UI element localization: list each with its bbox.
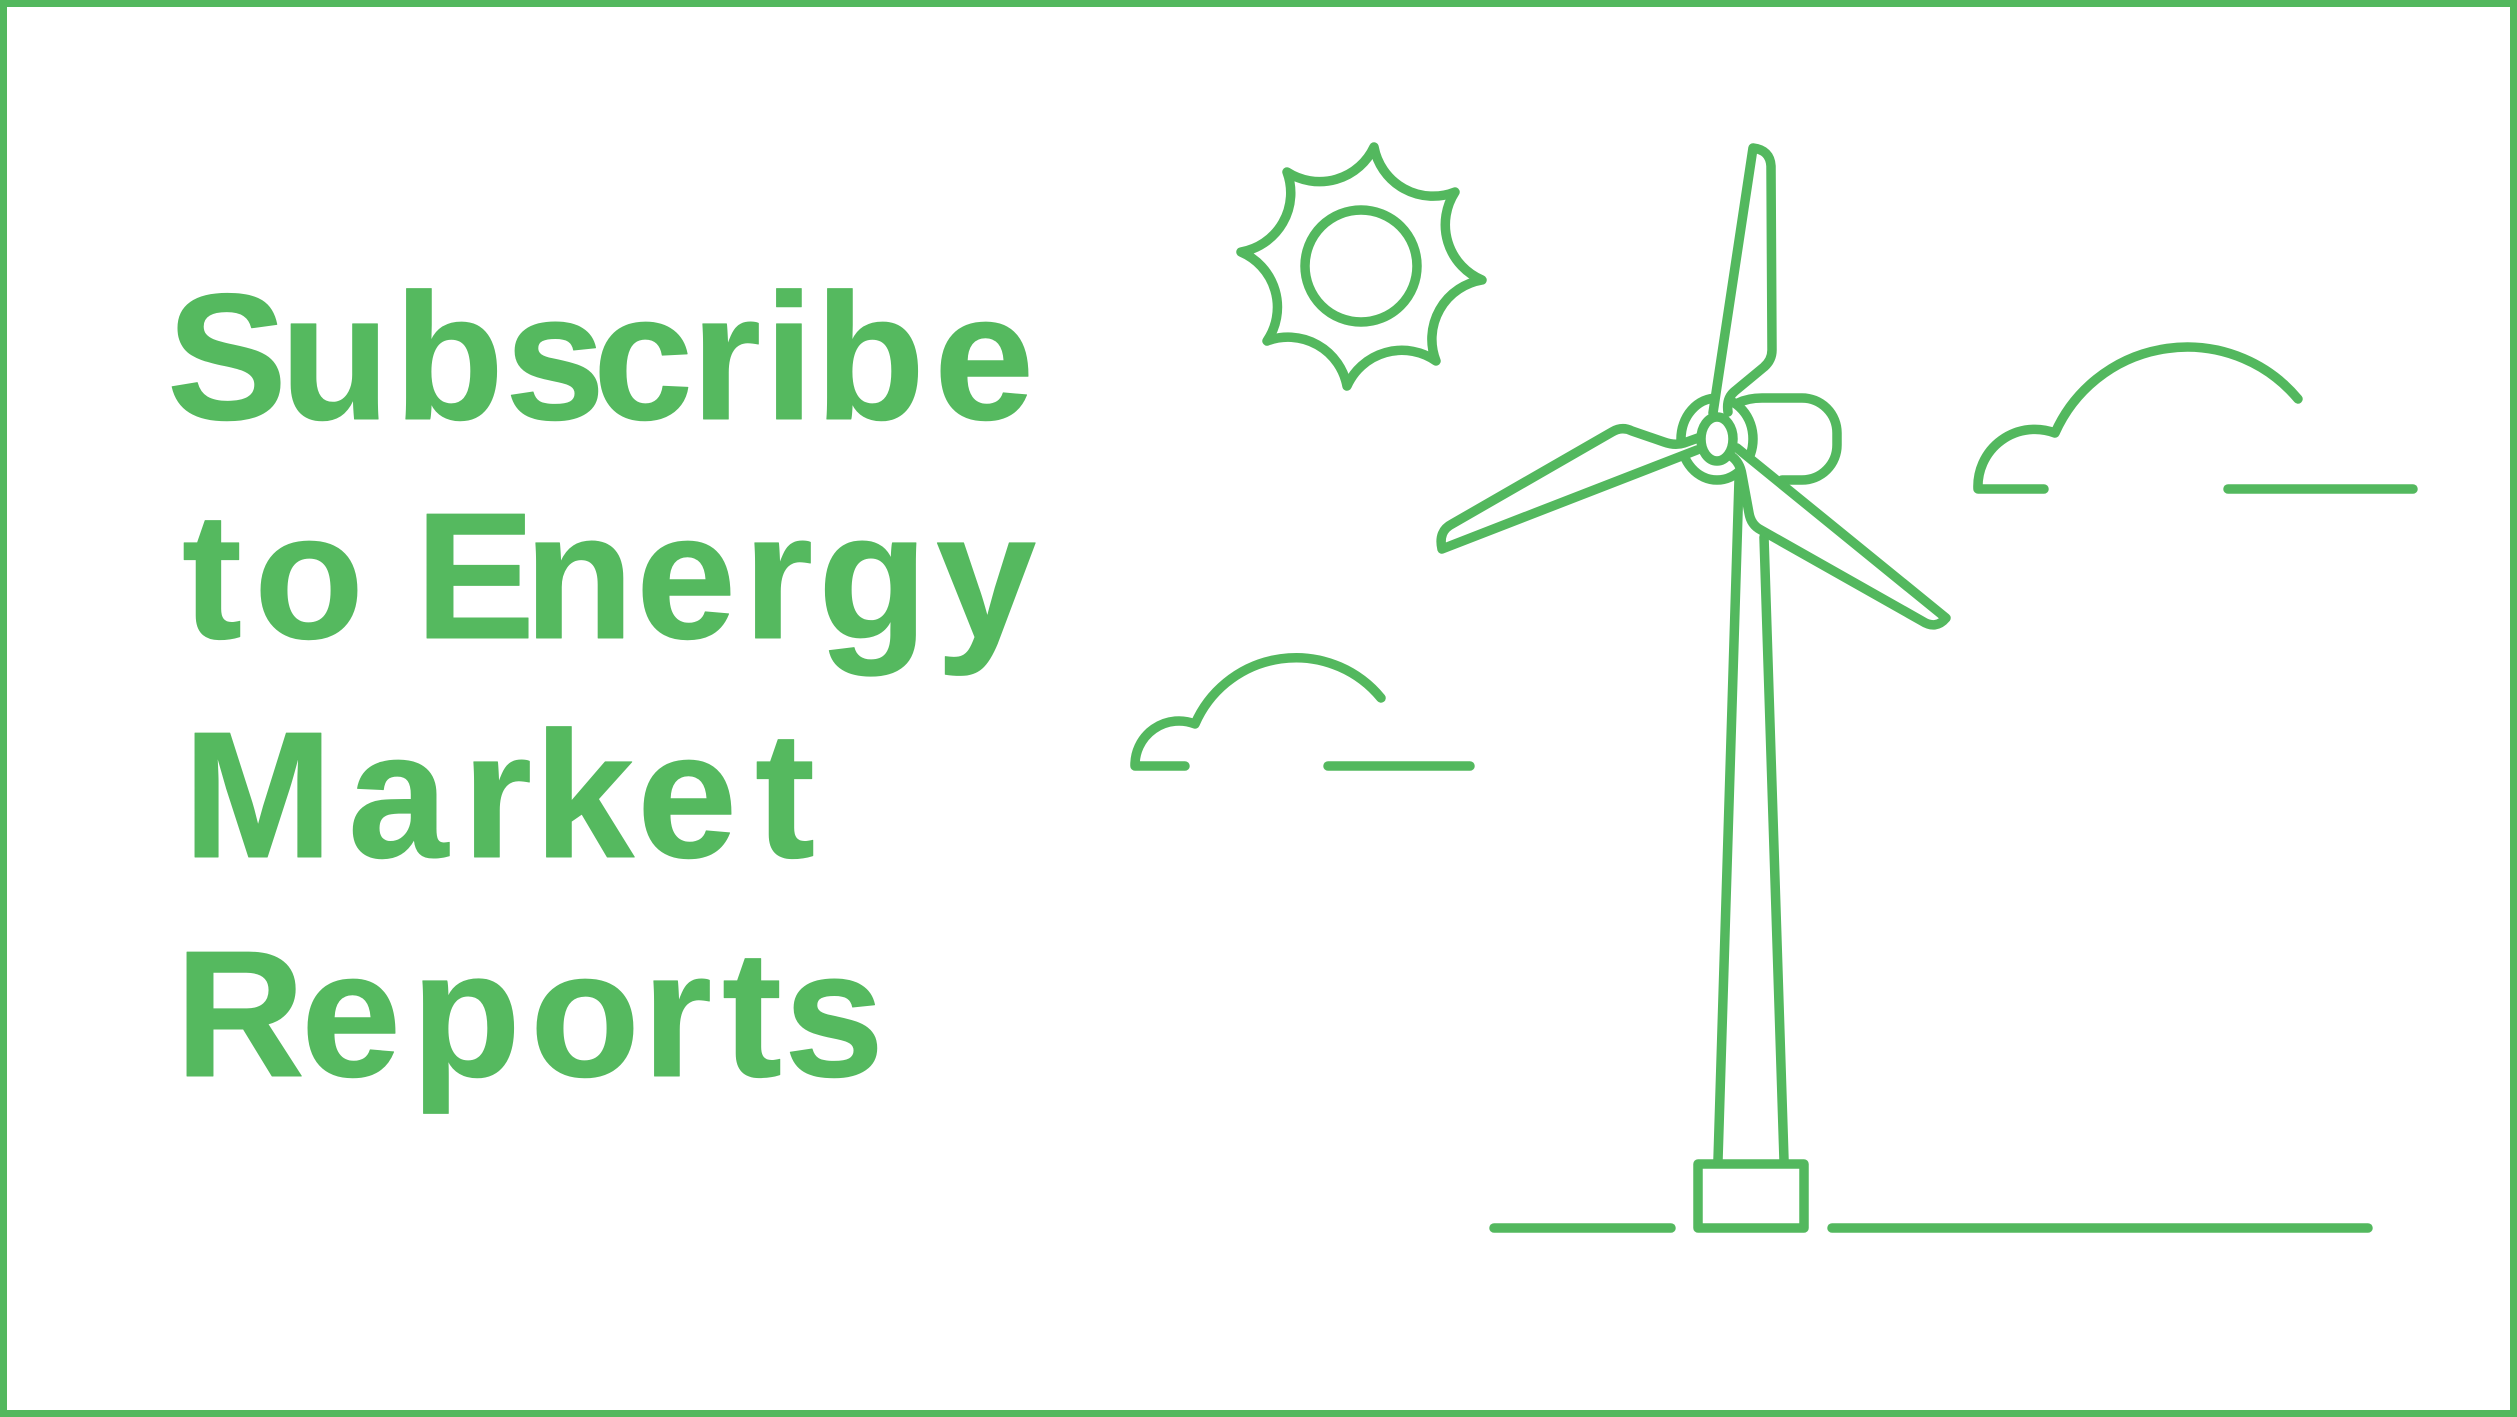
sun disc <box>1305 210 1417 322</box>
turbine top blade <box>1713 148 1772 413</box>
title line: Subscribe: Subscribe <box>167 257 1034 458</box>
icon: sun <box>1241 147 1482 386</box>
turbine hub <box>1701 417 1733 461</box>
title line: Market: Market <box>183 695 815 896</box>
turbine tower <box>1718 480 1784 1160</box>
turbine left blade <box>1441 429 1698 549</box>
icon: wind turbine <box>1441 148 1946 1228</box>
turbine right blade <box>1731 448 1946 625</box>
turbine hub ring <box>1681 398 1753 480</box>
icon: right cloud <box>1978 347 2413 489</box>
title line: to Energy: to Energy <box>182 476 1036 677</box>
ground line <box>1494 1223 2368 1233</box>
turbine nacelle <box>1738 398 1837 480</box>
turbine base <box>1698 1164 1804 1228</box>
title line: Reports: Reports <box>175 914 884 1115</box>
title <box>167 257 1036 1115</box>
sun rays outline <box>1241 147 1482 386</box>
icon: left cloud <box>1135 658 1470 766</box>
